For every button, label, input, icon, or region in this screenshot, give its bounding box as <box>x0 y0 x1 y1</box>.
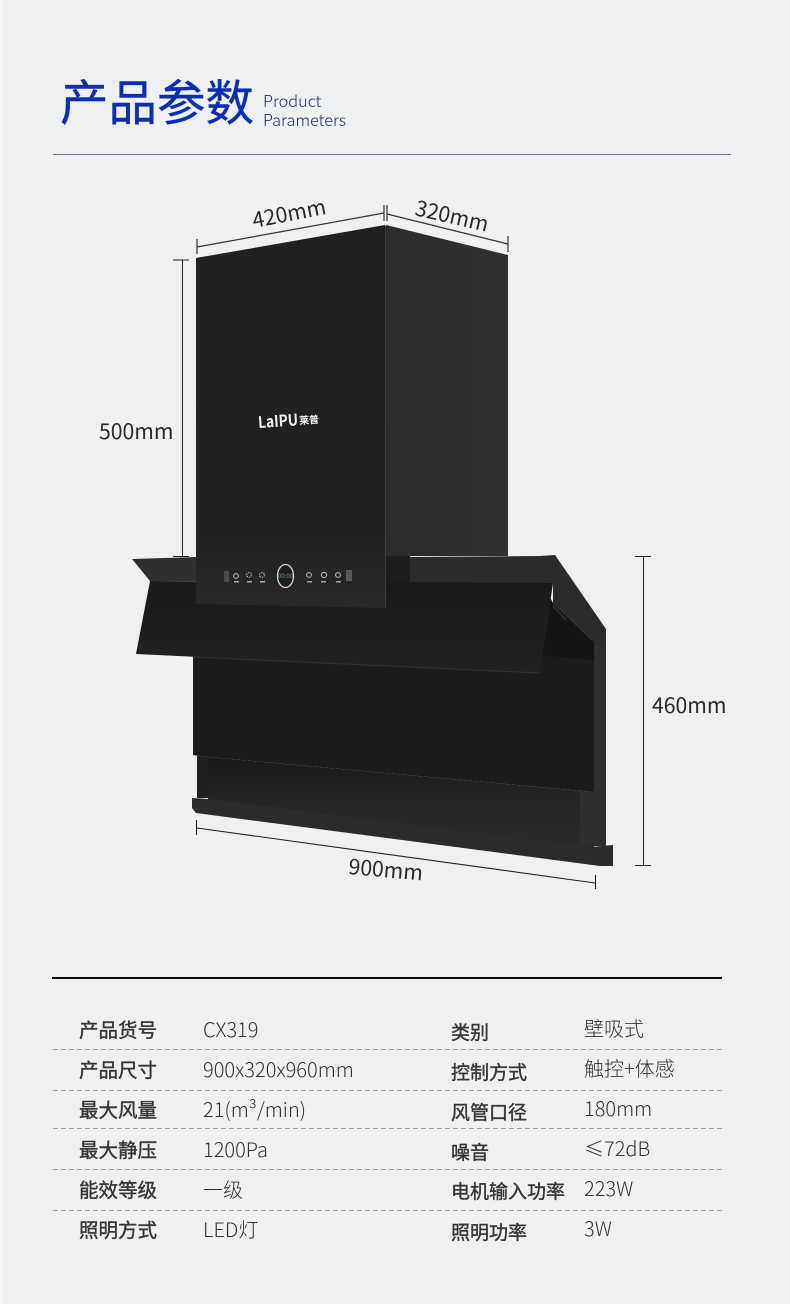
subtitle: Product Parameters: Parameters <box>263 107 346 131</box>
left top wing <box>132 557 197 581</box>
row: motor input power <box>451 1173 633 1204</box>
row: noise: ≤72dB <box>584 1133 650 1162</box>
lower recess <box>208 757 594 860</box>
row: control method: 控制方式 <box>451 1058 527 1085</box>
chimney corner highlight <box>384 226 386 607</box>
row: max airflow <box>79 1094 306 1123</box>
brand logo: LaIPU <box>257 406 299 433</box>
dimension: 500mm: 500mm <box>99 415 174 446</box>
digital readout: 00:00 <box>278 571 294 580</box>
brand logo: 莱普 <box>298 411 319 427</box>
chimney side face <box>386 225 508 556</box>
dimension: 460mm <box>635 556 727 866</box>
right top wing <box>405 555 606 650</box>
row: lighting type: LED灯 <box>203 1214 258 1243</box>
title block <box>60 64 346 134</box>
dimension: 460mm: 460mm <box>652 689 727 720</box>
header divider <box>53 154 731 155</box>
row: efficiency grade: 一级 <box>203 1174 243 1203</box>
lower body panel <box>193 640 594 792</box>
right indicator <box>346 570 352 581</box>
row: max static pressure <box>79 1134 268 1163</box>
subtitle: Product Parameters: Product <box>263 88 322 112</box>
row: product size <box>79 1054 354 1083</box>
left edge strip <box>0 0 2 1304</box>
angled glass panel <box>136 581 553 673</box>
row: product number: 产品货号 <box>79 1014 157 1043</box>
row: lighting power: 3W <box>584 1213 612 1242</box>
dimension: 900mm <box>196 820 596 889</box>
left lower bracket <box>193 755 208 798</box>
dimension: 900mm: 900mm <box>347 850 424 887</box>
touch control strip <box>224 564 352 588</box>
title: 产品参数: 产品参数 <box>60 64 254 134</box>
under-chimney dark fill <box>386 555 410 585</box>
row: product number: CX319 <box>203 1014 258 1043</box>
row: product number <box>79 1014 258 1043</box>
row: product size: 900x320x960mm <box>203 1054 354 1083</box>
dimension: 320mm <box>387 192 508 252</box>
row: efficiency grade: 能效等级 <box>79 1174 157 1203</box>
row: efficiency grade <box>79 1174 243 1203</box>
parameters table: right column <box>451 1013 675 1245</box>
table row dividers <box>53 1050 722 1210</box>
dimension: 420mm <box>197 190 387 254</box>
row: lighting type: 照明方式 <box>79 1214 157 1243</box>
dimension: 420mm: 420mm <box>249 190 328 235</box>
row: max airflow: 21(m³/min) <box>203 1094 306 1123</box>
row: max airflow: 最大风量 <box>79 1094 157 1123</box>
row: max static pressure: 1200Pa <box>203 1134 268 1163</box>
row: product size: 产品尺寸 <box>79 1054 157 1083</box>
dimension: 320mm: 320mm <box>412 192 492 239</box>
row: max static pressure: 最大静压 <box>79 1134 157 1163</box>
row: motor input power: 223W <box>584 1173 633 1202</box>
row: control method: 触控+体感 <box>584 1053 675 1082</box>
display ring <box>278 564 294 588</box>
table top rule <box>52 977 722 979</box>
row: lighting power: 照明功率 <box>451 1218 527 1245</box>
row: duct diameter: 风管口径 <box>451 1098 527 1125</box>
row: category <box>451 1013 644 1045</box>
subtitle: Product Parameters <box>263 88 346 131</box>
row: duct diameter: 180mm <box>584 1093 652 1122</box>
row: noise: 噪音 <box>451 1138 489 1165</box>
row: category: 壁吸式 <box>584 1013 644 1042</box>
glass lower edge <box>193 657 540 673</box>
vent opening <box>540 590 594 660</box>
dimension: 500mm <box>99 260 189 556</box>
parameters table: left column <box>79 1014 354 1243</box>
row: duct diameter <box>451 1093 652 1125</box>
icon captions <box>234 581 341 582</box>
row: control method <box>451 1053 675 1085</box>
right side strip <box>580 629 606 846</box>
range hood product illustration <box>132 225 613 866</box>
bottom tray <box>192 798 613 866</box>
row: lighting type <box>79 1214 258 1243</box>
left indicator <box>224 571 229 582</box>
function icons <box>234 572 340 578</box>
row: noise <box>451 1133 650 1165</box>
row: motor input power: 电机输入功率 <box>451 1177 565 1204</box>
chimney front face <box>196 225 386 608</box>
row: category: 类别 <box>451 1018 489 1045</box>
row: lighting power <box>451 1213 612 1245</box>
